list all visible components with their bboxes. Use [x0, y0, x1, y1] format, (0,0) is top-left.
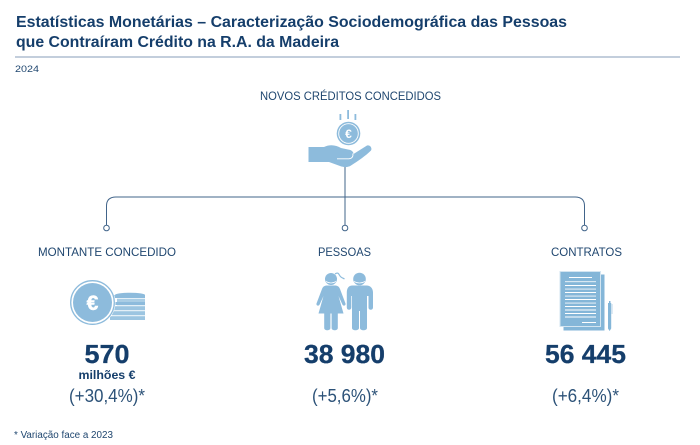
- title: Estatísticas Monetárias – Caracterização Sociodemográfica das Pessoas: [16, 14, 567, 31]
- icon: contract and pen: [560, 272, 613, 331]
- label: montante concedido: MONTANTE CONCEDIDO: [38, 245, 176, 259]
- value: 570: 570: [84, 339, 130, 369]
- label: pessoas: PESSOAS: [318, 245, 371, 259]
- unit: milhões €: milhões €: [78, 370, 136, 382]
- icon: hand with euro coin: €: [345, 127, 352, 141]
- footnote: * Variação face a 2023: [14, 430, 113, 441]
- icon: euro coins: [70, 280, 145, 326]
- value: 56 445: 56 445: [545, 339, 626, 369]
- title: que Contraíram Crédito na R.A. da Madeira: [16, 34, 339, 51]
- icon: euro coins: €: [87, 292, 99, 315]
- label: contratos: CONTRATOS: [551, 245, 622, 259]
- year: 2024: [15, 64, 39, 75]
- heading: novos créditos concedidos: NOVOS CRÉDITOS CONCEDIDOS: [260, 88, 441, 103]
- change: +6,4%: (+6,4%)*: [552, 386, 619, 406]
- icon: hand with euro coin: [308, 110, 371, 167]
- change: +30,4%: (+30,4%)*: [69, 386, 145, 406]
- column: montante concedido: [38, 245, 176, 406]
- icon: woman and man: [316, 273, 373, 330]
- change: +5,6%: (+5,6%)*: [312, 386, 378, 406]
- column: contratos: [545, 245, 626, 406]
- title: [16, 14, 567, 51]
- column: pessoas: [304, 245, 385, 406]
- value: 38 980: 38 980: [304, 339, 385, 369]
- connector lines: [104, 166, 587, 231]
